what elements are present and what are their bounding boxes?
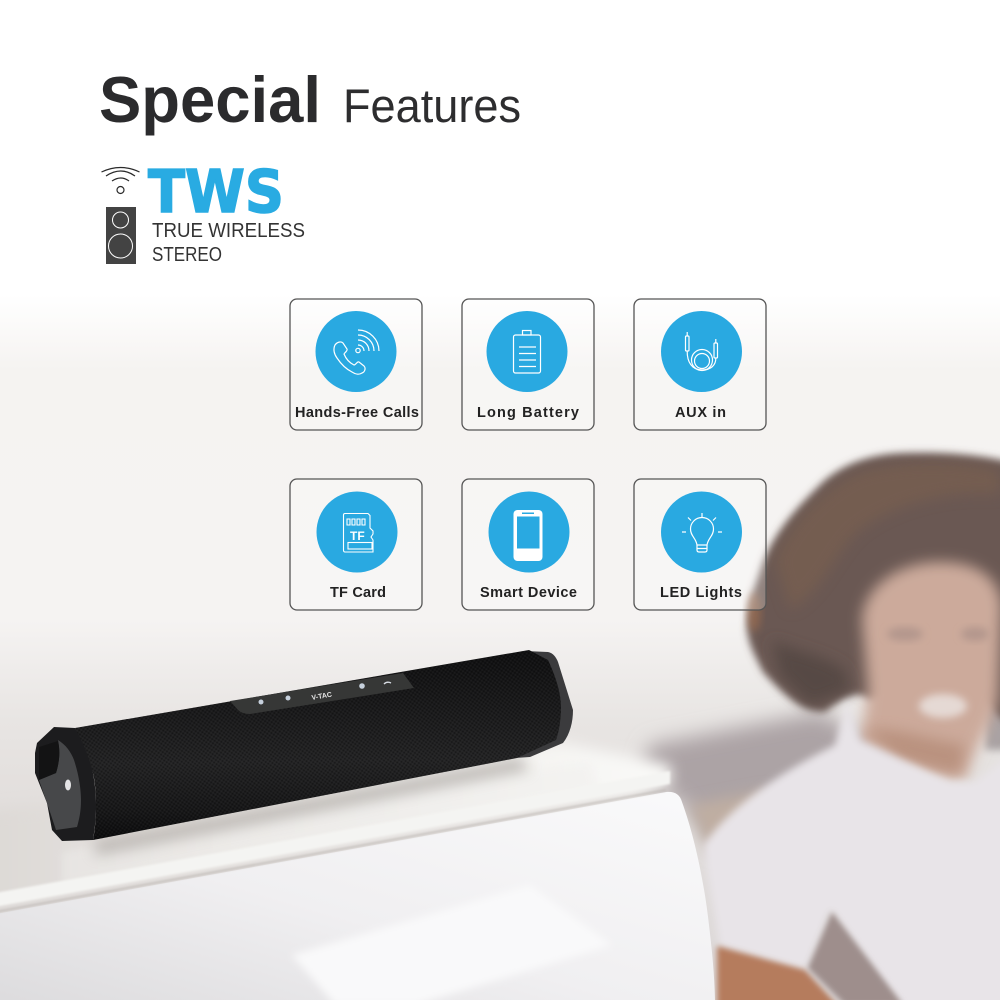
feature card: AUX in xyxy=(634,299,766,430)
True Wireless Stereo lettering: STEREO xyxy=(152,244,222,266)
feature card: Smart Device: Smart Device xyxy=(480,585,577,601)
icon: battery xyxy=(514,330,540,373)
feature card: TF Card: TF Card xyxy=(330,585,386,601)
TWS lettering: TWS xyxy=(148,157,284,226)
icon: aux cable xyxy=(686,332,718,370)
feature card: Hands-Free Calls xyxy=(290,299,422,430)
glossy highlight xyxy=(292,885,612,1000)
feature card: LED Lights: LED Lights xyxy=(660,585,742,601)
icon: smartphone xyxy=(514,510,542,561)
heading: Special: Special xyxy=(99,63,321,136)
feature card: Smart Device xyxy=(462,479,594,610)
power button on end cap xyxy=(65,780,71,790)
feature card: Hands-Free Calls: Hands-Free Calls xyxy=(295,405,419,421)
heading: Features: Features xyxy=(343,79,521,132)
feature card: Long Battery: Long Battery xyxy=(477,405,579,421)
control panel xyxy=(230,673,414,714)
feature card: Long Battery xyxy=(462,299,594,430)
shadow under speaker xyxy=(95,757,530,855)
sofa behind the table xyxy=(640,712,900,850)
woman's hair xyxy=(747,453,1000,725)
title xyxy=(99,63,521,136)
control panel: V-TAC xyxy=(311,692,333,702)
speaker xyxy=(35,650,573,841)
feature card: AUX in: AUX in xyxy=(675,405,726,421)
speaker reflection on table xyxy=(62,762,600,885)
TWS logo xyxy=(102,157,305,266)
icon: phone with signal xyxy=(334,330,379,374)
True Wireless Stereo lettering: TRUE WIRELESS xyxy=(152,220,305,242)
white table xyxy=(0,742,715,1000)
table front xyxy=(0,792,715,1000)
woman's arm xyxy=(717,946,842,1000)
icon: light bulb xyxy=(682,513,722,552)
left end cap xyxy=(35,727,96,841)
icon: memory card: TF xyxy=(350,529,365,543)
woman's shirt xyxy=(703,700,1000,1000)
feature card: LED Lights xyxy=(634,479,766,610)
icon: speaker box xyxy=(106,207,136,264)
table top surface xyxy=(0,742,671,915)
feature card: TF Card xyxy=(290,479,422,610)
True Wireless Stereo lettering xyxy=(152,220,305,266)
right end cap xyxy=(515,651,573,758)
woman's face and neck xyxy=(860,562,1000,780)
icon: wifi signal xyxy=(102,168,140,194)
table lip xyxy=(0,771,670,907)
speaker grille xyxy=(75,650,561,840)
